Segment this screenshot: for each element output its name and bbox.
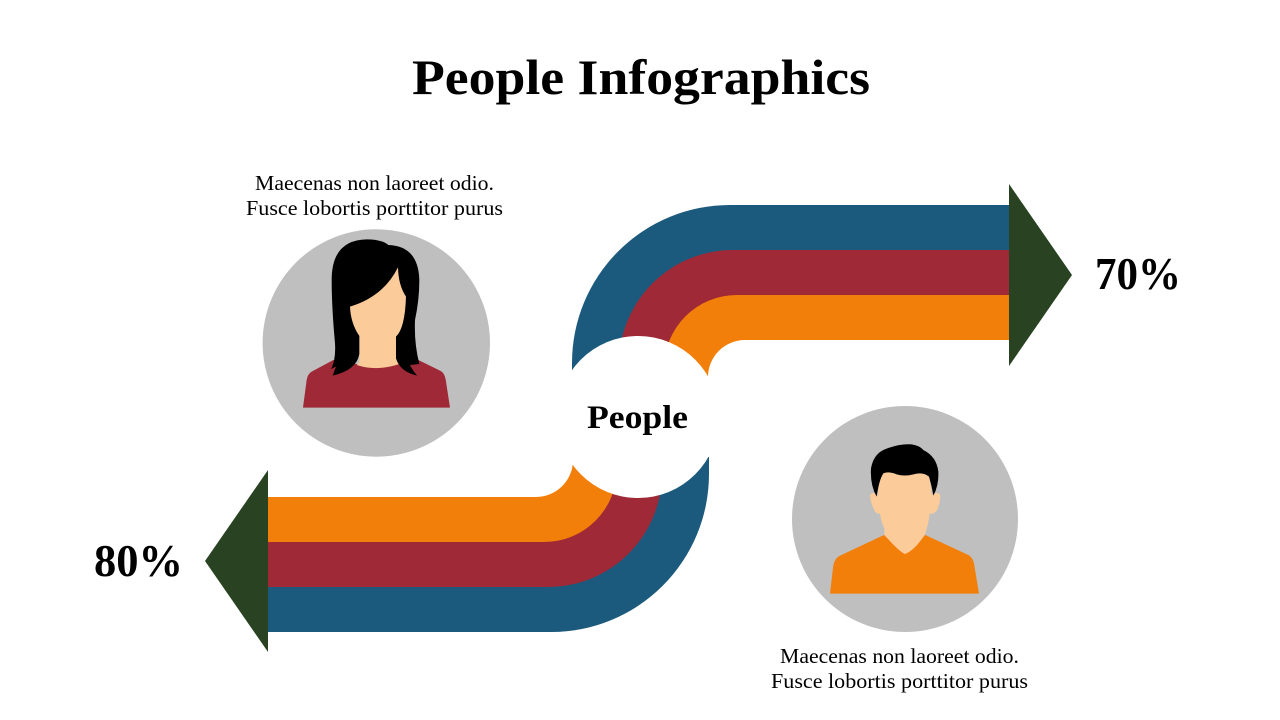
man shirt bbox=[830, 535, 979, 594]
woman shirt bbox=[303, 360, 450, 408]
man face and ears bbox=[870, 472, 940, 554]
woman hair bbox=[331, 239, 419, 376]
center circle bbox=[557, 336, 719, 498]
icon: man avatar bbox=[792, 406, 1018, 632]
orange band top bbox=[664, 295, 1010, 380]
blue band bottom bbox=[267, 457, 709, 632]
percentage 70%: 70% bbox=[1095, 249, 1181, 299]
red band top bbox=[619, 250, 1010, 380]
text block bottom right: Fusce lobortis porttitor purus bbox=[771, 669, 1028, 693]
panel: top arrow bbox=[572, 184, 1072, 380]
title: People Infographics bbox=[412, 49, 870, 105]
percentage 80%: 80% bbox=[94, 536, 183, 586]
text block top left: Maecenas non laoreet odio. bbox=[255, 171, 494, 195]
text block bottom right: Maecenas non laoreet odio. bbox=[780, 644, 1019, 668]
icon: woman avatar bbox=[263, 229, 490, 457]
text block top left bbox=[246, 171, 503, 220]
woman face and neck bbox=[350, 267, 406, 368]
man hair bbox=[871, 444, 938, 497]
center label: People bbox=[587, 400, 688, 436]
orange band bottom bbox=[267, 457, 617, 542]
panel: bottom arrow bbox=[205, 457, 709, 652]
text block top left: Fusce lobortis porttitor purus bbox=[246, 196, 503, 220]
red band bottom bbox=[267, 457, 662, 587]
arrowhead right bbox=[1009, 184, 1072, 366]
text block bottom right bbox=[771, 644, 1028, 693]
blue band top bbox=[572, 205, 1010, 380]
arrowhead left bbox=[205, 470, 268, 652]
